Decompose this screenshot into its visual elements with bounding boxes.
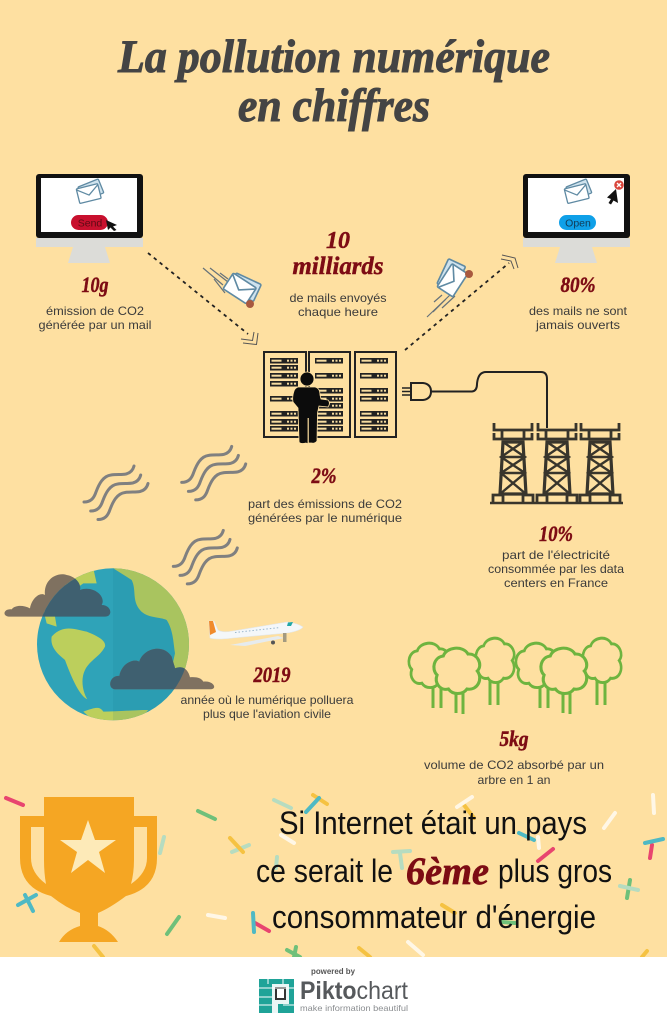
icon: piktochart logo <box>259 979 294 1013</box>
main message: consommateur d'énergie <box>272 899 596 935</box>
stat: 10 percent: 10% <box>539 521 573 546</box>
stat: 10 milliards: milliards <box>292 253 384 280</box>
footer panel: make information beautiful <box>300 1003 408 1013</box>
stat: 2019 <box>180 662 354 721</box>
icon: flying mail left <box>203 268 263 308</box>
icon: monitor open <box>523 174 630 263</box>
stat: 10 g: 10g <box>82 272 108 297</box>
icon: trophy <box>20 797 157 942</box>
title: La pollution numérique <box>117 31 550 83</box>
icon: monitor send <box>36 174 143 263</box>
stat: 2019: 2019 <box>253 662 290 687</box>
stat: 10 percent: part de l'électricité <box>502 548 610 562</box>
confetti decoration <box>6 795 663 957</box>
footer panel: powered by <box>311 967 356 976</box>
icon: pylons <box>490 423 623 503</box>
icon: data center servers <box>264 352 396 444</box>
stat: 10 percent <box>488 521 624 590</box>
icon: trees <box>409 638 621 714</box>
stat: 10 g: émission de CO2 <box>46 304 144 318</box>
arrow: mail to servers <box>148 253 258 344</box>
stat: 5 kg: volume de CO2 absorbé par un <box>424 758 604 772</box>
main message <box>256 805 612 935</box>
icon: airplane <box>209 621 303 646</box>
main message: plus gros <box>498 853 612 889</box>
stat: 10 percent: centers en France <box>504 576 608 590</box>
stat: 10 g <box>38 272 152 332</box>
footer panel: Piktochart <box>300 977 408 1005</box>
stat: 2019: plus que l'aviation civile <box>203 707 331 721</box>
stat: 10 milliards: 10 <box>326 228 350 254</box>
stat: 10 milliards: chaque heure <box>298 305 378 319</box>
icon: globe with clouds <box>4 568 214 720</box>
main message: Si Internet était un pays <box>279 805 587 841</box>
stat: 80 percent: jamais ouverts <box>535 318 620 332</box>
stat: 5 kg: arbre en 1 an <box>478 773 550 787</box>
title: en chiffres <box>238 80 430 132</box>
stat: 80 percent: 80% <box>560 272 596 297</box>
stat: 80 percent <box>529 272 628 332</box>
stat: 2 percent: générées par le numérique <box>248 511 402 525</box>
icon: smoke waves <box>84 446 246 584</box>
icon: technician <box>293 372 330 444</box>
main message: 6ème <box>406 850 489 893</box>
stat: 2 percent: part des émissions de CO2 <box>248 497 402 511</box>
stat: 2 percent: 2% <box>311 463 336 488</box>
stat: 5 kg: 5kg <box>500 726 528 751</box>
main message: ce serait le <box>256 853 393 889</box>
icon: monitor open: Open <box>565 218 591 230</box>
icon: plug and cable <box>402 372 547 428</box>
stat: 5 kg <box>424 726 604 787</box>
stat: 10 milliards <box>290 228 386 319</box>
stat: 80 percent: des mails ne sont <box>529 304 628 318</box>
stat: 10 milliards: de mails envoyés <box>290 291 386 305</box>
footer panel <box>0 957 667 1024</box>
arrow: servers to mail <box>405 255 518 350</box>
title <box>117 31 550 132</box>
icon: flying mail right <box>427 257 473 317</box>
stat: 10 percent: consommée par les data <box>488 562 624 576</box>
stat: 10 g: générée par un mail <box>38 318 152 332</box>
icon: monitor send: Send <box>78 218 102 230</box>
stat: 2019: année où le numérique polluera <box>180 693 354 707</box>
stat: 2 percent <box>248 463 402 525</box>
